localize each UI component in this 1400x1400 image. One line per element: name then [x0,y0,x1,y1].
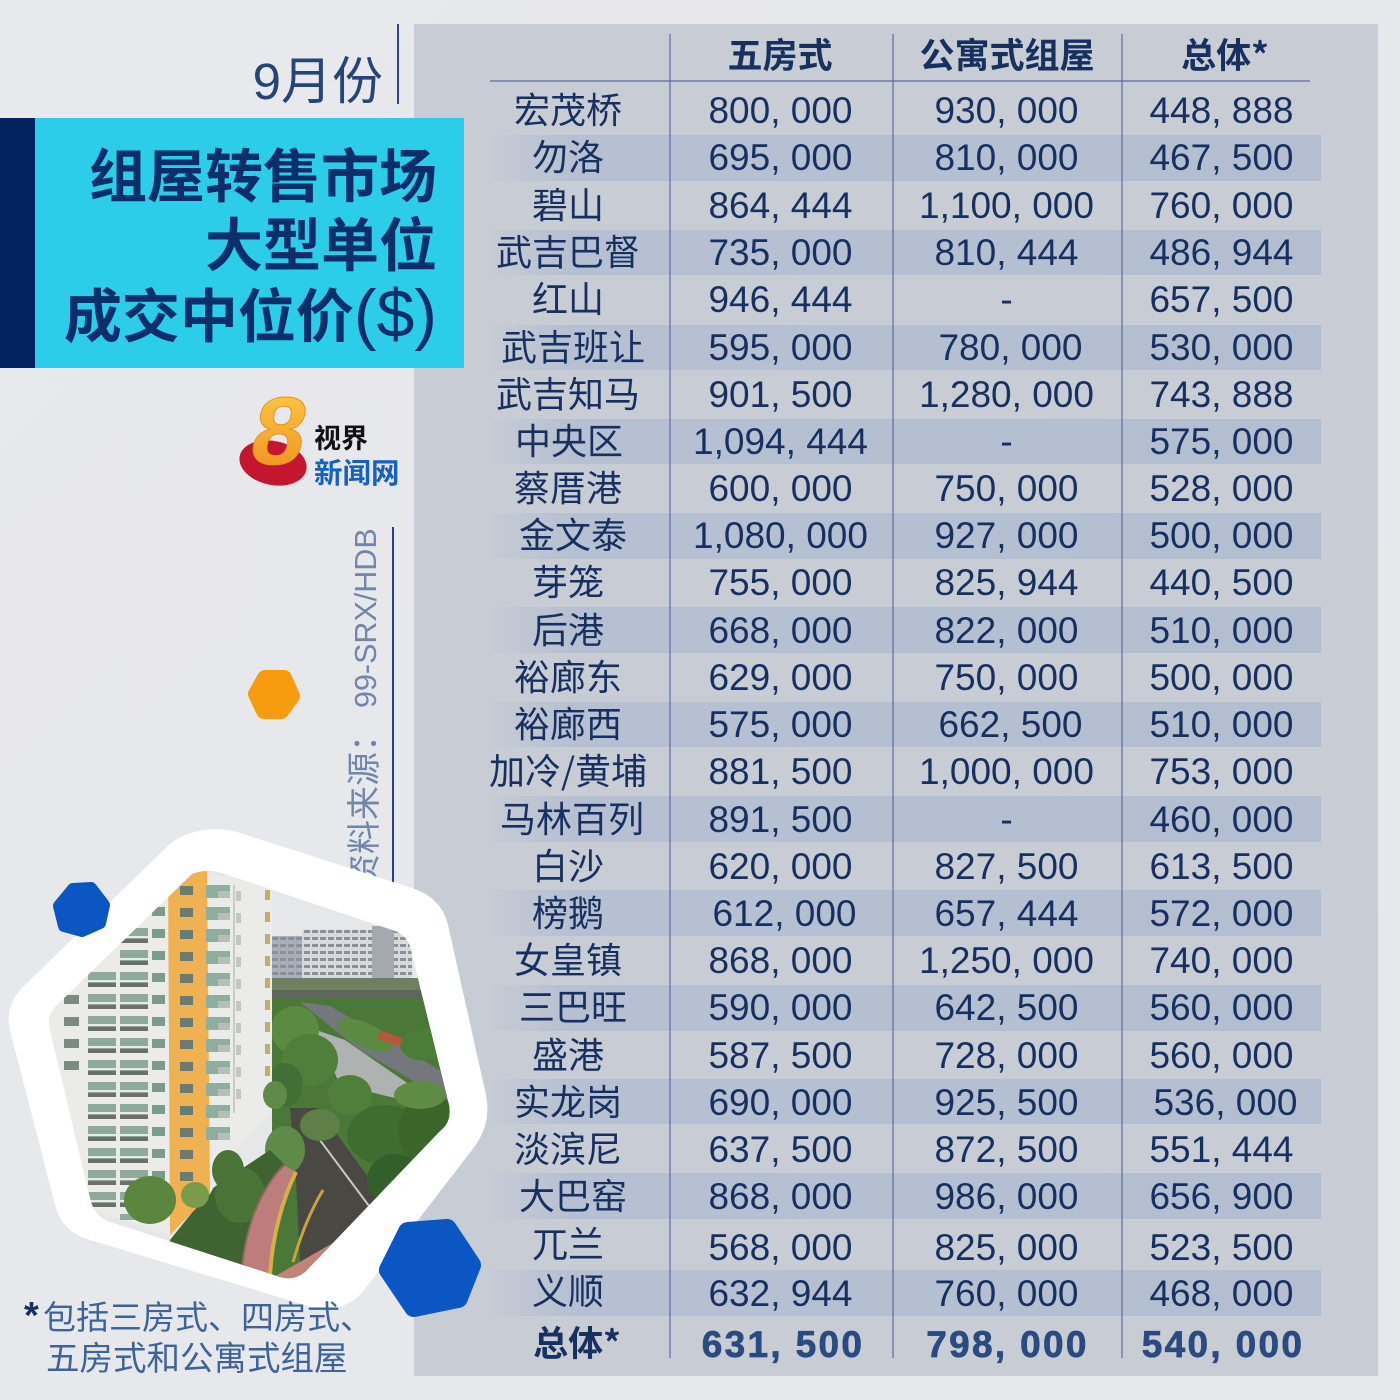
table rows: 986, 000 [934,1176,1079,1217]
table header: 总体* [1181,28,1269,79]
table rows: 兀兰 [532,1216,604,1268]
table rows: 575, 000 [708,704,853,745]
table rows: 946, 444 [708,279,853,320]
title banner: 成交中位价($) [64,276,437,352]
table rows: 868, 000 [708,940,853,981]
table rows: 740, 000 [1149,940,1294,981]
table totals row: 总体* [533,1316,621,1367]
table rows: 510, 000 [1149,610,1294,651]
alternating row bands [490,135,1321,1316]
table rows: 572, 000 [1149,893,1294,934]
table rows: 810, 444 [934,232,1079,273]
table rows: 467, 500 [1149,137,1294,178]
table rows: 755, 000 [708,562,853,603]
table rows: 468, 000 [1149,1273,1294,1314]
table rows: 三巴旺 [519,979,627,1031]
icon: large blue hexagon [389,1229,471,1307]
lower road [290,1108,380,1262]
table rows [489,82,1298,1315]
table rows: 735, 000 [708,232,853,273]
table rows: 690, 000 [708,1082,853,1123]
table rows: 1,100, 000 [919,185,1094,226]
table rows: 891, 500 [708,799,853,840]
table rows: 536, 000 [1153,1082,1298,1123]
table rows: 925, 500 [934,1082,1079,1123]
table rows: 500, 000 [1149,515,1294,556]
logo: 8视界新闻网: 视界 [314,424,368,454]
table rows: 蔡厝港 [514,460,622,512]
table rows: 657, 444 [934,893,1079,934]
table rows: 810, 000 [934,137,1079,178]
table rows: 827, 500 [934,846,1079,887]
table rows: 马林百列 [500,791,644,843]
table rows: 568, 000 [708,1227,853,1268]
table rows: 金文泰 [519,507,627,559]
table rows: 碧山 [532,177,604,229]
table rows: 600, 000 [708,468,853,509]
upper road [300,1002,448,1101]
logo: 8视界新闻网: 8 [244,377,316,485]
table rows: 芽笼 [532,554,604,606]
table rows: 587, 500 [708,1035,853,1076]
footnote [24,1295,373,1378]
table rows: 1,094, 444 [693,421,868,462]
table rows: 盛港 [532,1027,604,1079]
table header [727,28,1269,79]
table rows: 560, 000 [1149,1035,1294,1076]
table rows: 642, 500 [934,987,1079,1028]
table rows: 勿洛 [532,129,604,181]
table rows: 后港 [532,602,604,654]
table rows: 590, 000 [708,987,853,1028]
table rows: 裕廊东 [514,649,622,701]
ground greenery [272,998,462,1288]
table rows: 728, 000 [934,1035,1079,1076]
title banner [0,118,464,368]
walkway bridge [242,1165,296,1276]
table rows: 实龙岗 [514,1074,622,1126]
table rows: 448, 888 [1149,90,1294,131]
source credit: 资料来源：99-SRX/HDB [346,528,384,888]
table rows: 612, 000 [712,893,857,934]
table rows: 657, 500 [1149,279,1294,320]
main block [191,1023,272,1214]
logo: 8视界新闻网: 新闻网 [314,458,400,490]
footnote: * [24,1295,39,1337]
table rows: 743, 888 [1149,374,1294,415]
table rows: 662, 500 [938,704,1083,745]
table rows: 523, 500 [1149,1227,1294,1268]
table rows: 白沙 [532,838,604,890]
table rows: 中央区 [515,413,623,465]
month label: 9月份 [253,53,383,110]
table rows: 1,080, 000 [693,515,868,556]
table rows: 901, 500 [708,374,853,415]
table rows: 629, 000 [708,657,853,698]
footnote: 包括三房式、四房式、 [43,1299,373,1336]
table rows: 榜鹅 [532,885,604,937]
table rows: 560, 000 [1149,987,1294,1028]
table rows: 女皇镇 [514,932,622,984]
table rows: 750, 000 [934,657,1079,698]
table: housing resale median prices [489,28,1321,1367]
foreground trees [124,1176,176,1224]
table rows: 440, 500 [1149,562,1294,603]
table totals row: 540, 000 [1142,1324,1304,1365]
table rows: 637, 500 [708,1129,853,1170]
footnote: 五房式和公寓式组屋 [46,1341,348,1378]
table rows: 1,250, 000 [919,940,1094,981]
ground below building [170,1150,286,1267]
panel: table background [414,24,1378,1376]
table totals row: 798, 000 [926,1324,1089,1365]
table rows: 加冷/黄埔 [489,743,647,795]
table rows: 595, 000 [708,327,853,368]
table rows: 530, 000 [1149,327,1294,368]
table rows: 780, 000 [938,327,1083,368]
table rows: 613, 500 [1149,846,1294,887]
table rows: 裕廊西 [514,696,622,748]
table rows: 825, 944 [934,562,1079,603]
table rows: 868, 000 [708,1176,853,1217]
table rows: 淡滨尼 [514,1121,622,1173]
table rows: 武吉班让 [501,319,645,371]
table rows: 义顺 [532,1263,604,1315]
table rows: 656, 900 [1149,1176,1294,1217]
table rows: 460, 000 [1149,799,1294,840]
table rows: 大巴窑 [519,1168,627,1220]
table rows: 695, 000 [708,137,853,178]
distant blocks [272,936,302,978]
icon: orange hexagon [256,678,292,711]
table rows: 武吉巴督 [496,224,640,276]
table rows: 881, 500 [708,751,853,792]
table rows: 800, 000 [708,90,853,131]
table rows: - [1000,799,1013,840]
table totals row [533,1316,1304,1367]
table rows: 1,000, 000 [919,751,1094,792]
table rows: - [1000,279,1013,320]
table rows: 930, 000 [934,90,1079,131]
table rows: 510, 000 [1149,704,1294,745]
table rows: 668, 000 [708,610,853,651]
table rows: 宏茂桥 [514,82,622,134]
table rows: - [1000,421,1013,462]
table rows: 632, 944 [708,1273,853,1314]
logo: 8视界新闻网 [235,377,400,492]
table rows: 822, 000 [934,610,1079,651]
table rows: 750, 000 [934,468,1079,509]
photo: HDB flats in white hexagon frame [9,829,487,1309]
table rows: 红山 [532,271,604,323]
table rows: 825, 000 [934,1227,1079,1268]
table rows: 620, 000 [708,846,853,887]
table rows: 528, 000 [1149,468,1294,509]
table header: 公寓式组屋 [919,28,1095,79]
table rows: 872, 500 [934,1129,1079,1170]
table rows: 武吉知马 [496,366,640,418]
table rows: 864, 444 [708,185,853,226]
table rows: 760, 000 [934,1273,1079,1314]
title banner: 组屋转售市场 [89,145,437,210]
table rows: 575, 000 [1149,421,1294,462]
table header: 五房式 [727,28,833,79]
icon: small blue hexagon [59,888,104,931]
table rows: 760, 000 [1149,185,1294,226]
title banner: 大型单位 [205,214,437,279]
table totals row: 631, 500 [702,1324,864,1365]
table rows: 1,280, 000 [919,374,1094,415]
table rows: 486, 944 [1149,232,1294,273]
table rows: 927, 000 [934,515,1079,556]
table rows: 500, 000 [1149,657,1294,698]
table rows: 551, 444 [1149,1129,1294,1170]
trees [265,1006,462,1206]
table rows: 753, 000 [1149,751,1294,792]
